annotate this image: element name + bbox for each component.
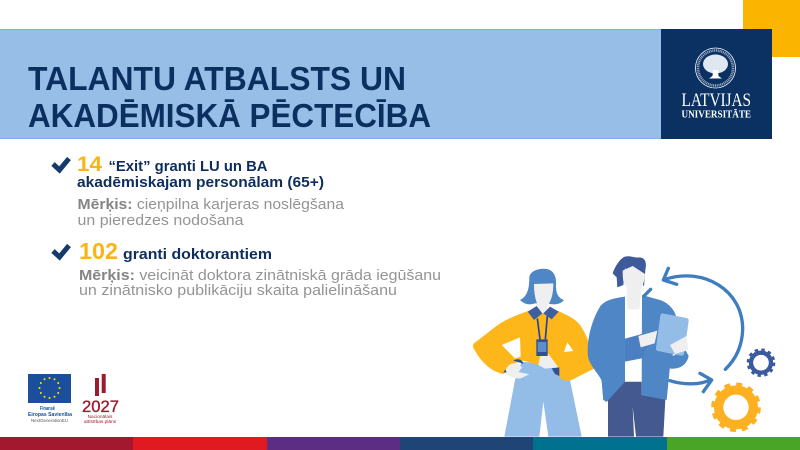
jacket right xyxy=(642,295,676,400)
title: TALANTU ATBALSTS UN xyxy=(28,60,406,97)
tablet xyxy=(656,313,689,356)
goal text: un pieredzes nodošana xyxy=(78,212,244,229)
colour strip xyxy=(0,437,800,450)
EU flag xyxy=(28,374,71,403)
logo wordmark: LATVIJAS xyxy=(682,91,751,111)
goal text: Mērķis: veicināt doktora zinātniskā grāda iegūšanu xyxy=(79,267,441,284)
funding text: Eiropas Savienība xyxy=(28,412,73,418)
badge xyxy=(536,339,548,356)
funding text xyxy=(28,406,73,423)
title xyxy=(28,60,431,134)
stat: 14: 14 xyxy=(77,153,102,176)
face and neck xyxy=(623,266,645,309)
trousers xyxy=(504,362,582,437)
hands xyxy=(505,354,558,379)
hair xyxy=(520,269,564,304)
collar xyxy=(528,306,559,320)
logo wordmark xyxy=(682,91,751,120)
lanyard xyxy=(537,316,547,339)
illustration: man with tablet and arrows xyxy=(588,256,774,437)
plan text: attīstības plāns xyxy=(84,419,117,425)
funding text: Finansē xyxy=(40,406,55,412)
left hand xyxy=(638,331,657,347)
heading: doctoral grants: granti doktorantiem xyxy=(123,246,272,263)
plan text xyxy=(84,414,117,425)
goal text: un zinātnisko publikāciju skaita palielināšanu xyxy=(79,282,397,299)
goal text xyxy=(78,196,345,229)
funding text: NextGenerationEU xyxy=(31,418,68,423)
right hand xyxy=(670,336,688,354)
heading: Exit grants: “Exit” granti LU un BA xyxy=(108,158,268,175)
hair xyxy=(613,256,646,287)
illustration: woman with badge xyxy=(473,269,594,437)
logo: Latvijas Universitāte xyxy=(661,29,772,139)
jacket sleeve xyxy=(625,330,657,362)
plan text: Nacionālais xyxy=(88,414,113,420)
bars xyxy=(95,374,106,396)
jacket left xyxy=(588,297,625,402)
cuffs xyxy=(503,359,559,376)
icon: gold gear xyxy=(714,385,758,430)
2027: 2027 xyxy=(82,398,119,416)
logo: EU funding xyxy=(28,374,73,423)
stat: 102: 102 xyxy=(79,238,118,264)
arm gaps xyxy=(502,337,573,358)
shirt xyxy=(623,293,643,382)
icon: check mark xyxy=(53,158,69,170)
logo: 2027 plan xyxy=(82,374,119,425)
icon: check mark xyxy=(53,246,69,257)
goal text xyxy=(79,267,441,299)
trousers xyxy=(608,382,665,437)
gold corner square xyxy=(743,0,800,57)
far arm xyxy=(670,350,689,369)
sweater xyxy=(473,311,594,381)
grant item: Exit grants xyxy=(53,153,345,229)
flag stars xyxy=(38,377,60,399)
heading: Exit grants: akadēmiskajam personālam (65+) xyxy=(77,174,324,191)
heading: Exit grants xyxy=(77,158,324,191)
title: AKADĒMISKĀ PĒCTECĪBA xyxy=(28,97,431,134)
grant item: doctoral grants xyxy=(53,238,441,299)
title banner xyxy=(0,29,661,139)
icon: navy gear xyxy=(748,350,774,376)
icon: tree seal xyxy=(696,48,736,88)
logo wordmark: UNIVERSITĀTE xyxy=(682,110,751,120)
cycle arrows xyxy=(644,268,743,392)
goal text: Mērķis: cieņpilna karjeras noslēgšana xyxy=(78,196,345,213)
face and neck xyxy=(534,283,553,315)
